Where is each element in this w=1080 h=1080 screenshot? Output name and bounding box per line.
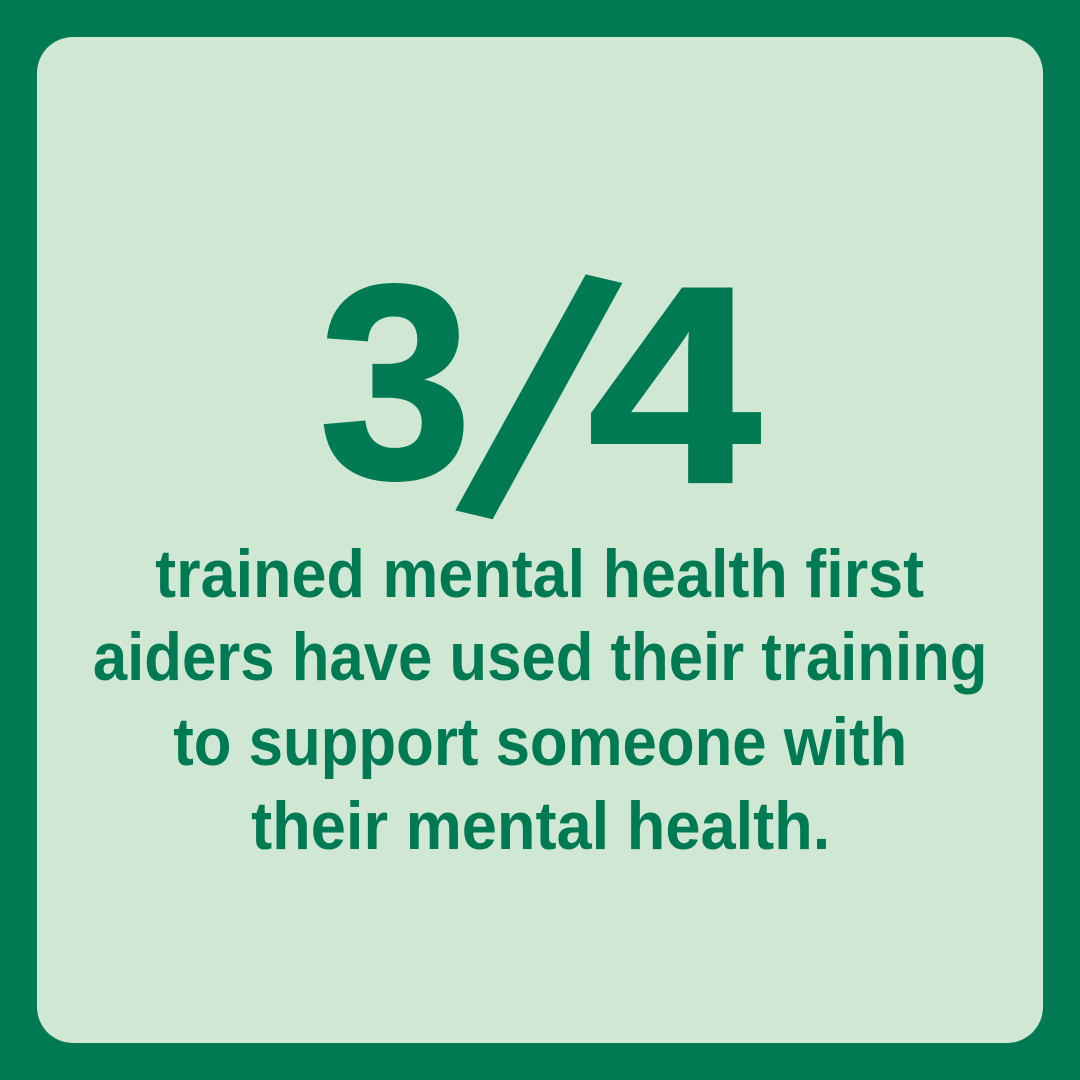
description text: trained mental health first — [156, 536, 924, 612]
description text — [93, 536, 987, 864]
description text: their mental health. — [251, 788, 831, 864]
big statistic: 3/4: 4 — [588, 229, 763, 541]
description text: aiders have used their training — [93, 618, 987, 694]
big statistic: 3/4: / — [430, 205, 647, 595]
description text: to support someone with — [173, 704, 907, 780]
big statistic: 3/4: 3 — [319, 229, 472, 536]
